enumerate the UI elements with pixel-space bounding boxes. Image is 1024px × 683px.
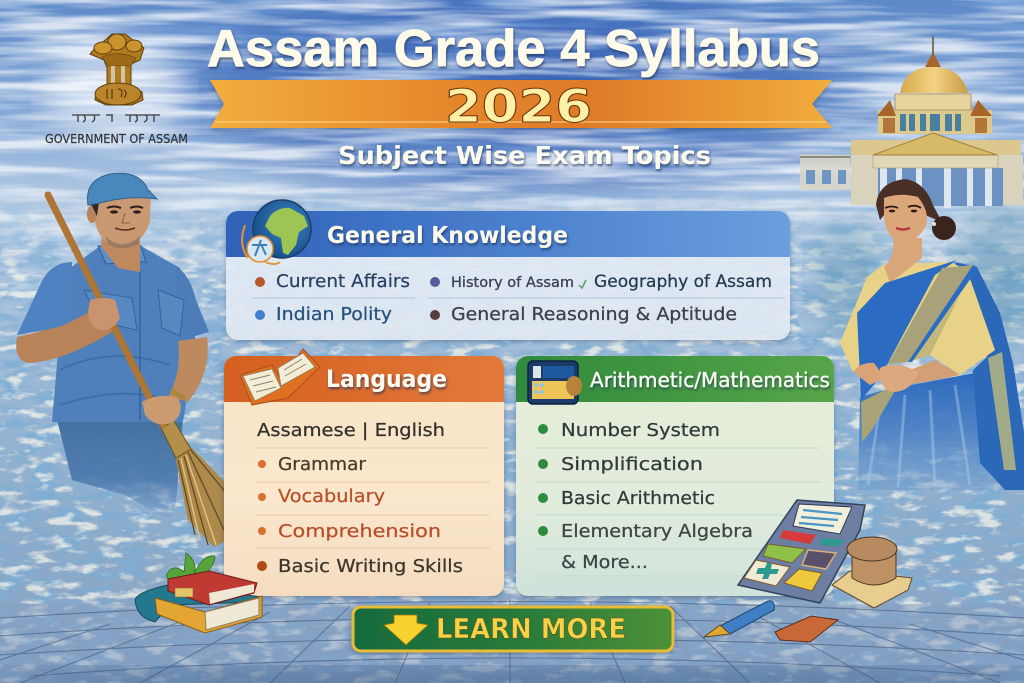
ribbon banner <box>210 80 832 133</box>
icon: open book <box>240 349 320 405</box>
forearms and hands <box>853 363 885 385</box>
list item: general reasoning and aptitude: General Reasoning & Aptitude <box>451 305 737 325</box>
yellow book <box>155 596 262 633</box>
blouse <box>840 262 995 375</box>
list item: history of assam: History of Assam <box>451 275 574 291</box>
neck and head <box>884 238 922 283</box>
illustration: assembly building <box>800 36 1023 208</box>
text: language names: Assamese | English <box>257 420 445 441</box>
icon: calculator <box>528 361 582 404</box>
icon: globe with compass <box>242 200 311 264</box>
sari skirt <box>858 372 1005 490</box>
panel: general knowledge <box>226 200 790 340</box>
panel: arithmetic and mathematics <box>516 356 834 596</box>
panel header <box>224 356 504 402</box>
panel header <box>516 356 834 402</box>
sari drape back <box>955 262 1024 490</box>
motto decoration <box>72 115 160 122</box>
broom stick <box>48 195 163 425</box>
icon: down arrow <box>384 615 428 645</box>
calculator <box>738 500 865 603</box>
list item: current affairs: Current Affairs <box>276 272 410 292</box>
shirt <box>52 246 196 422</box>
trousers <box>57 420 183 520</box>
panel: language <box>224 349 504 596</box>
illustration: sanitation worker with broom <box>16 173 242 547</box>
clip pad <box>775 616 838 642</box>
list item: grammar: Grammar <box>278 455 367 475</box>
button: learn more <box>353 607 673 651</box>
list item: basic writing skills: Basic Writing Skills <box>278 557 463 577</box>
pen <box>704 601 774 637</box>
illustration: calculator, stand, pen and clip <box>704 500 912 642</box>
hands <box>88 298 120 330</box>
red book <box>168 571 257 605</box>
list item: elementary algebra: Elementary Algebra <box>561 522 753 542</box>
list item: simplification: Simplification <box>561 455 703 475</box>
text: year: 2026 <box>445 80 592 133</box>
cap <box>87 173 157 205</box>
broom bristles <box>161 421 242 547</box>
subtitle: Subject Wise Exam Topics <box>338 141 711 170</box>
wooden stand <box>832 537 912 608</box>
illustration: stack of books with plant <box>135 553 262 633</box>
list item: vocabulary: Vocabulary <box>278 487 385 507</box>
title: Assam Grade 4 Syllabus <box>207 20 820 78</box>
text: and more: & More... <box>561 553 648 573</box>
arms <box>16 304 112 363</box>
blue book <box>135 585 262 622</box>
neck and head <box>101 230 140 272</box>
illustration: woman in blue sari <box>840 179 1024 490</box>
text: government of assam: GOVERNMENT OF ASSAM <box>45 132 188 146</box>
sari pallu <box>857 260 957 400</box>
list item: indian polity: Indian Polity <box>276 305 392 325</box>
icon: lion capital emblem <box>90 34 144 105</box>
list item: geography of assam: Geography of Assam <box>594 272 772 292</box>
panel header <box>226 211 790 257</box>
list item: basic arithmetic: Basic Arithmetic <box>561 489 715 509</box>
heading: General Knowledge <box>327 223 568 249</box>
button label: LEARN MORE <box>436 612 626 645</box>
heading: Arithmetic/Mathematics <box>590 368 830 392</box>
icon: green tick <box>579 280 586 288</box>
plant <box>166 553 215 584</box>
emblem: Government of Assam <box>45 34 188 146</box>
ground pavement lines <box>0 600 1024 683</box>
heading: Language <box>326 365 447 393</box>
list item: comprehension: Comprehension <box>278 522 441 542</box>
list item: number system: Number System <box>561 421 720 441</box>
